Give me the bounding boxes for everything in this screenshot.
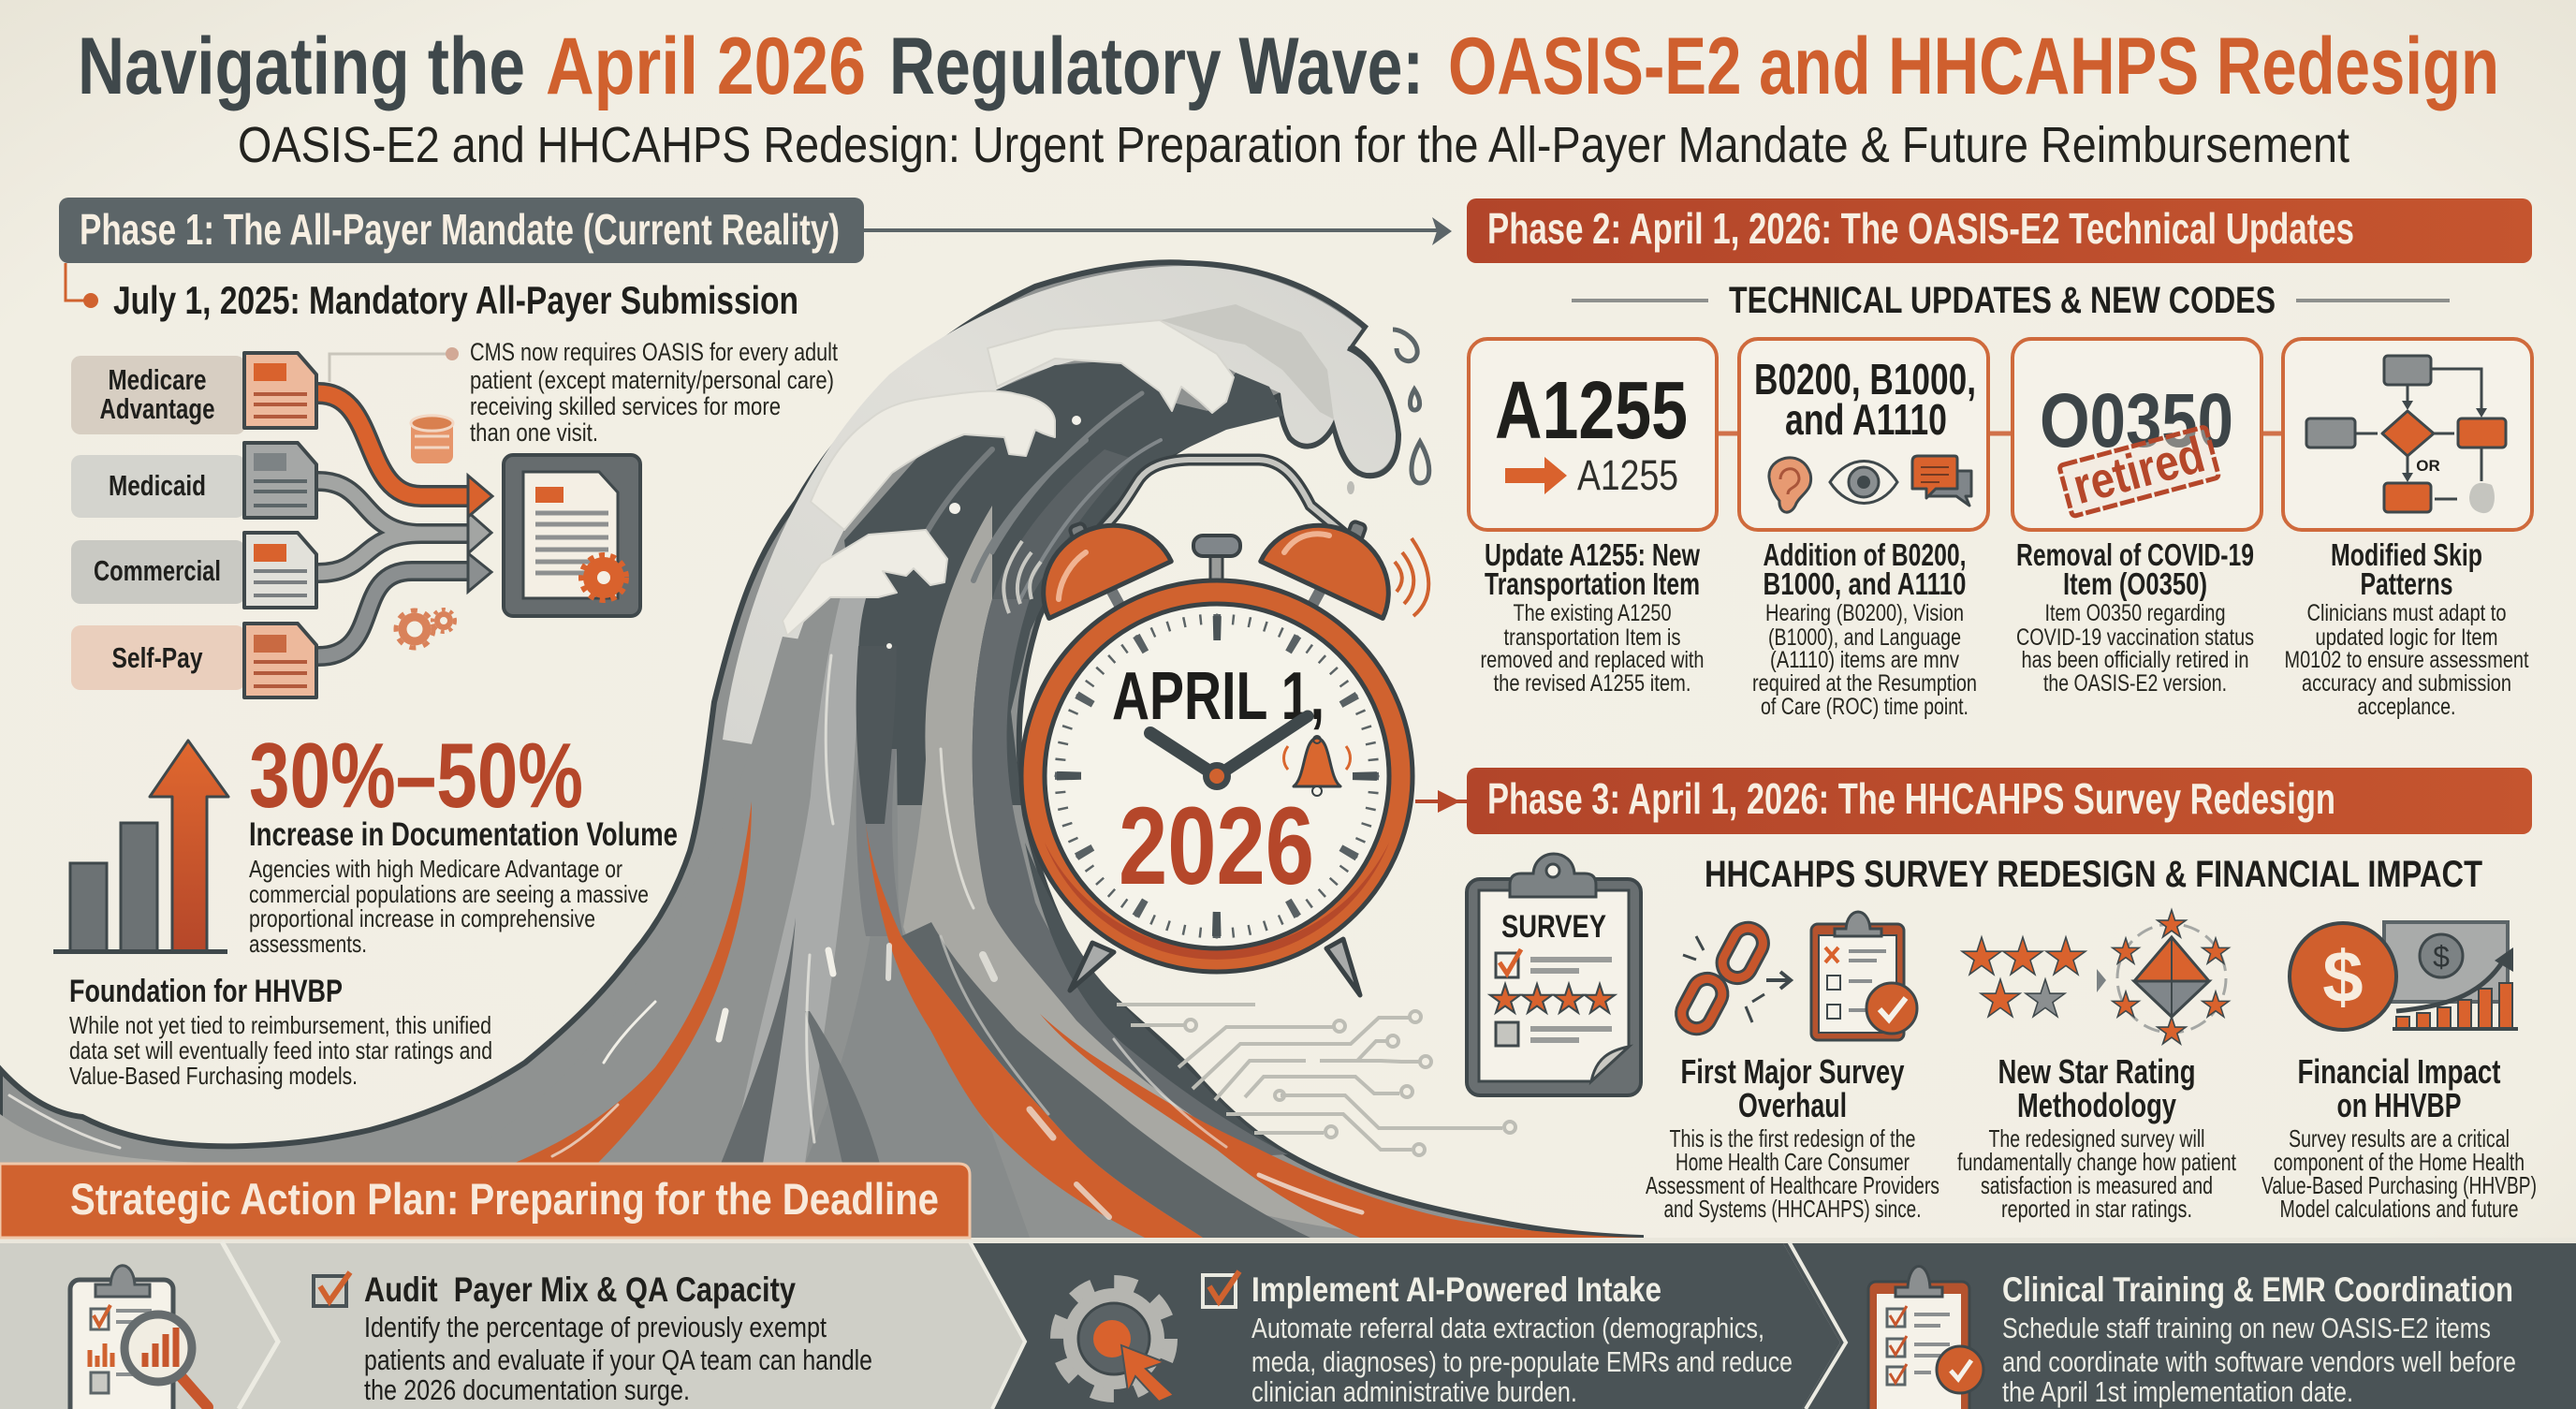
icon: gear with cursor — [1061, 1286, 1174, 1402]
text: new star rating methodology: Methodology — [2017, 1086, 2176, 1124]
action: AI-powered intake: Automate referral data extraction (demographics, — [1251, 1312, 1764, 1344]
title — [78, 22, 2499, 111]
icon: dollar and rising bills: $ — [2433, 940, 2450, 974]
callout: CMS requirement: receiving skilled services for more — [470, 392, 781, 420]
illustration: alarm clock — [1003, 460, 1428, 995]
action: AI-powered intake: Implement AI-Powered Intake — [1251, 1270, 1661, 1309]
text: update A1255: the revised A1255 item. — [1494, 670, 1690, 697]
title: Navigating the — [78, 22, 525, 111]
payer: Medicare Advantage: Advantage — [99, 392, 215, 425]
stamp: retired: retired — [2068, 426, 2210, 515]
text: first major survey overhaul: First Major Survey — [1681, 1052, 1904, 1091]
card: skip pattern flowchart — [2283, 339, 2532, 530]
card: O0350 retired: O0350 — [2040, 378, 2233, 463]
icon: database — [411, 416, 453, 463]
stat: documentation volume: assessments. — [249, 930, 367, 958]
callout: CMS requirement: than one visit. — [470, 418, 598, 447]
payer: Medicaid: Medicaid — [109, 469, 206, 502]
text: modified skip patterns: accuracy and submission — [2302, 670, 2511, 697]
text: addition of items: Hearing (B0200), Vision — [1765, 600, 1964, 626]
text: removal of COVID-19 item — [2016, 537, 2254, 697]
action: audit payer mix: patients and evaluate if your QA team can handle — [364, 1343, 872, 1376]
banner: strategic action plan — [0, 1164, 970, 1238]
payer: Medicare Advantage — [71, 353, 316, 434]
icon: eye — [1830, 461, 1897, 504]
arrow: orange payer stream — [318, 393, 492, 517]
clock date: 2026: 2026 — [1119, 785, 1314, 908]
text block: foundation for HHVBP: While not yet tied to reimbursement, this unified — [69, 1011, 491, 1039]
text: removal of COVID-19 item: the OASIS-E2 version. — [2043, 670, 2227, 697]
action: AI-powered intake — [1203, 1270, 1793, 1408]
text: update A1255: Transportation Item — [1485, 566, 1700, 601]
card: O0350 retired — [2012, 339, 2261, 530]
text block: foundation for HHVBP: data set will eventually feed into star ratings and — [69, 1036, 492, 1064]
panel: action 2 background — [970, 1243, 1840, 1409]
card: A1255: A1255 — [1577, 451, 1678, 499]
text: new star rating methodology: fundamentally change how patient — [1957, 1148, 2237, 1176]
text block: foundation for HHVBP: Foundation for HHVBP — [69, 974, 343, 1009]
clock date: April 1: APRIL 1, — [1112, 659, 1325, 734]
panel: phase 1 header — [59, 198, 864, 263]
callout: CMS requirement: patient (except maternity/personal care) — [470, 366, 834, 394]
stat: documentation volume — [249, 724, 678, 958]
icon: dollar and rising bills: $ — [2322, 935, 2364, 1018]
arrow: clock to phase 3 — [1415, 790, 1467, 813]
panel: action 3 background — [1783, 1243, 2576, 1409]
icon: water drops — [1347, 330, 1429, 494]
arrows: gray payer streams — [318, 481, 491, 656]
text: update A1255: The existing A1250 — [1513, 600, 1672, 626]
text: financial impact on HHVBP: Survey results are a critical — [2289, 1124, 2510, 1152]
icon: consolidated document — [504, 455, 640, 616]
icon: speech bubbles — [1912, 456, 1971, 506]
panel: phase 1 date: July 1, 2025: Mandatory All-Payer Submission — [113, 278, 798, 322]
action: audit payer mix — [314, 1270, 872, 1406]
text: removal of COVID-19 item: COVID-19 vaccination status — [2016, 624, 2254, 651]
text: update A1255 — [1481, 537, 1704, 697]
callout: CMS requirement: CMS now requires OASIS for every adult — [470, 338, 838, 366]
payer: Commercial: Commercial — [94, 554, 221, 587]
text: modified skip patterns: Clinicians must adapt to — [2306, 600, 2507, 626]
card: B0200, B1000, A1110: B0200, B1000, — [1754, 355, 1976, 404]
callout: CMS requirement — [329, 338, 838, 447]
text: first major survey overhaul — [1646, 1052, 1939, 1223]
icon: dollar and rising bills — [2290, 922, 2518, 1030]
dark central bands — [856, 646, 897, 824]
text: first major survey overhaul: and Systems (HHCAHPS) since. — [1664, 1195, 1921, 1223]
chart: rising bars with arrow — [53, 741, 228, 954]
payer: Commercial — [71, 533, 316, 608]
icon: survey clipboard: SURVEY — [1501, 909, 1606, 945]
text: addition of items: Addition of B0200, — [1764, 537, 1966, 572]
stat: documentation volume: 30%–50% — [249, 724, 583, 827]
text: removal of COVID-19 item: Removal of COVID-19 — [2016, 537, 2254, 572]
text: modified skip patterns — [2284, 537, 2529, 720]
action: audit payer mix: the 2026 documentation surge. — [364, 1373, 690, 1406]
text: addition of items: (B1000), and Language — [1768, 624, 1961, 651]
panel: phase 1 date — [66, 263, 798, 322]
panel: action 1 background — [0, 1243, 1025, 1409]
text: financial impact on HHVBP: on HHVBP — [2336, 1086, 2462, 1124]
icon: small gears — [396, 609, 455, 648]
payer flow diagram — [71, 338, 838, 697]
panel: phase 3 header — [1467, 768, 2532, 834]
text: addition of items — [1752, 537, 1977, 720]
circuit traces — [1117, 1005, 1515, 1155]
text: update A1255: transportation Item is — [1503, 624, 1681, 651]
text: modified skip patterns: Modified Skip — [2331, 537, 2482, 572]
text: removal of COVID-19 item: Item O0350 regarding — [2044, 600, 2226, 626]
title: Regulatory Wave: — [889, 22, 1424, 111]
panel: phase 1 header: Phase 1: The All-Payer Mandate (Current Reality) — [80, 205, 840, 254]
text: new star rating methodology: New Star Rating — [1998, 1052, 2196, 1091]
title: April 2026 — [546, 22, 866, 111]
text: financial impact on HHVBP: Financial Impact — [2297, 1052, 2501, 1091]
icon: audit clipboard with magnifier — [70, 1266, 208, 1409]
text block: foundation for HHVBP: Value-Based Furchasing models. — [69, 1062, 358, 1090]
text: modified skip patterns: Patterns — [2361, 566, 2452, 601]
text: first major survey overhaul: Assessment of Healthcare Providers — [1646, 1171, 1939, 1199]
text: new star rating methodology: satisfaction is measured and — [1981, 1171, 2213, 1199]
action: clinical training — [2002, 1270, 2516, 1408]
text: first major survey overhaul: Home Health Care Consumer — [1676, 1148, 1910, 1176]
payer: Medicaid — [71, 443, 316, 518]
panel: strategic action plan strip — [0, 1238, 2576, 1409]
right streams — [903, 506, 1498, 1238]
icon: training clipboard — [1868, 1266, 1983, 1409]
action: clinical training: the April 1st implementation date. — [2002, 1375, 2353, 1408]
text: first major survey overhaul: This is the first redesign of the — [1670, 1124, 1915, 1152]
banner: strategic action plan: Strategic Action Plan: Preparing for the Deadline — [70, 1174, 939, 1224]
card: A1255: A1255 — [1495, 365, 1688, 456]
text: removal of COVID-19 item: Item (O0350) — [2063, 566, 2207, 601]
text: addition of items: of Care (ROC) time point. — [1761, 694, 1969, 720]
text: new star rating methodology — [1957, 1052, 2237, 1223]
text: addition of items: required at the Resumption — [1752, 670, 1977, 697]
text: new star rating methodology: reported in star ratings. — [2001, 1195, 2192, 1223]
card: B0200, B1000, A1110: and A1110 — [1785, 395, 1947, 444]
main left stream — [449, 637, 847, 1164]
text: removal of COVID-19 item: has been officially retired in — [2022, 647, 2248, 673]
payer: Medicare Advantage: Medicare — [109, 363, 206, 396]
text: modified skip patterns: acceplance. — [2357, 694, 2456, 720]
stat: documentation volume: Increase in Documentation Volume — [249, 816, 678, 853]
icon: small bell — [1284, 736, 1350, 796]
card: B0200, B1000, A1110 — [1739, 339, 1988, 530]
heading: technical updates: TECHNICAL UPDATES & NEW CODES — [1729, 280, 2276, 321]
text: addition of items: (A1110) items are mnv — [1770, 647, 1959, 673]
stat: documentation volume: Agencies with high Medicare Advantage or — [249, 855, 622, 883]
stat: documentation volume: proportional increase in comprehensive — [249, 904, 595, 932]
illustration: giant wave — [0, 262, 1641, 1255]
action: audit payer mix: Audit Payer Mix & QA Capacity — [364, 1270, 796, 1309]
action: AI-powered intake: meda, diagnoses) to pre-populate EMRs and reduce — [1251, 1345, 1793, 1378]
icon: survey clipboard — [1467, 854, 1641, 1095]
card connectors — [1717, 431, 2283, 436]
text: first major survey overhaul: Overhaul — [1738, 1086, 1847, 1124]
orange bands — [513, 801, 752, 1164]
text: new star rating methodology: The redesigned survey will — [1988, 1124, 2205, 1152]
arrow: phase 1 to phase 2 — [864, 217, 1452, 245]
icon: star rating to composite — [1962, 910, 2229, 1044]
text: financial impact on HHVBP — [2261, 1052, 2537, 1223]
action: audit payer mix: Identify the percentage of previously exempt — [364, 1311, 827, 1343]
text: update A1255: removed and replaced with — [1481, 647, 1704, 673]
text block: foundation for HHVBP — [69, 974, 492, 1090]
icon: ear — [1769, 458, 1811, 512]
payer: Self-Pay: Self-Pay — [112, 641, 203, 674]
action: AI-powered intake: clinician administrative burden. — [1251, 1375, 1577, 1408]
stat: documentation volume: commercial populations are seeing a massive — [249, 880, 649, 908]
card: skip pattern flowchart: OR — [2416, 457, 2440, 475]
text: addition of items: B1000, and A1110 — [1764, 566, 1966, 601]
text: update A1255: Update A1255: New — [1485, 537, 1700, 572]
payer: Self-Pay — [71, 624, 316, 697]
card: A1255 — [1469, 339, 1717, 530]
text: modified skip patterns: updated logic for Item — [2316, 624, 2497, 651]
icon: broken chain to checklist — [1676, 912, 1917, 1040]
